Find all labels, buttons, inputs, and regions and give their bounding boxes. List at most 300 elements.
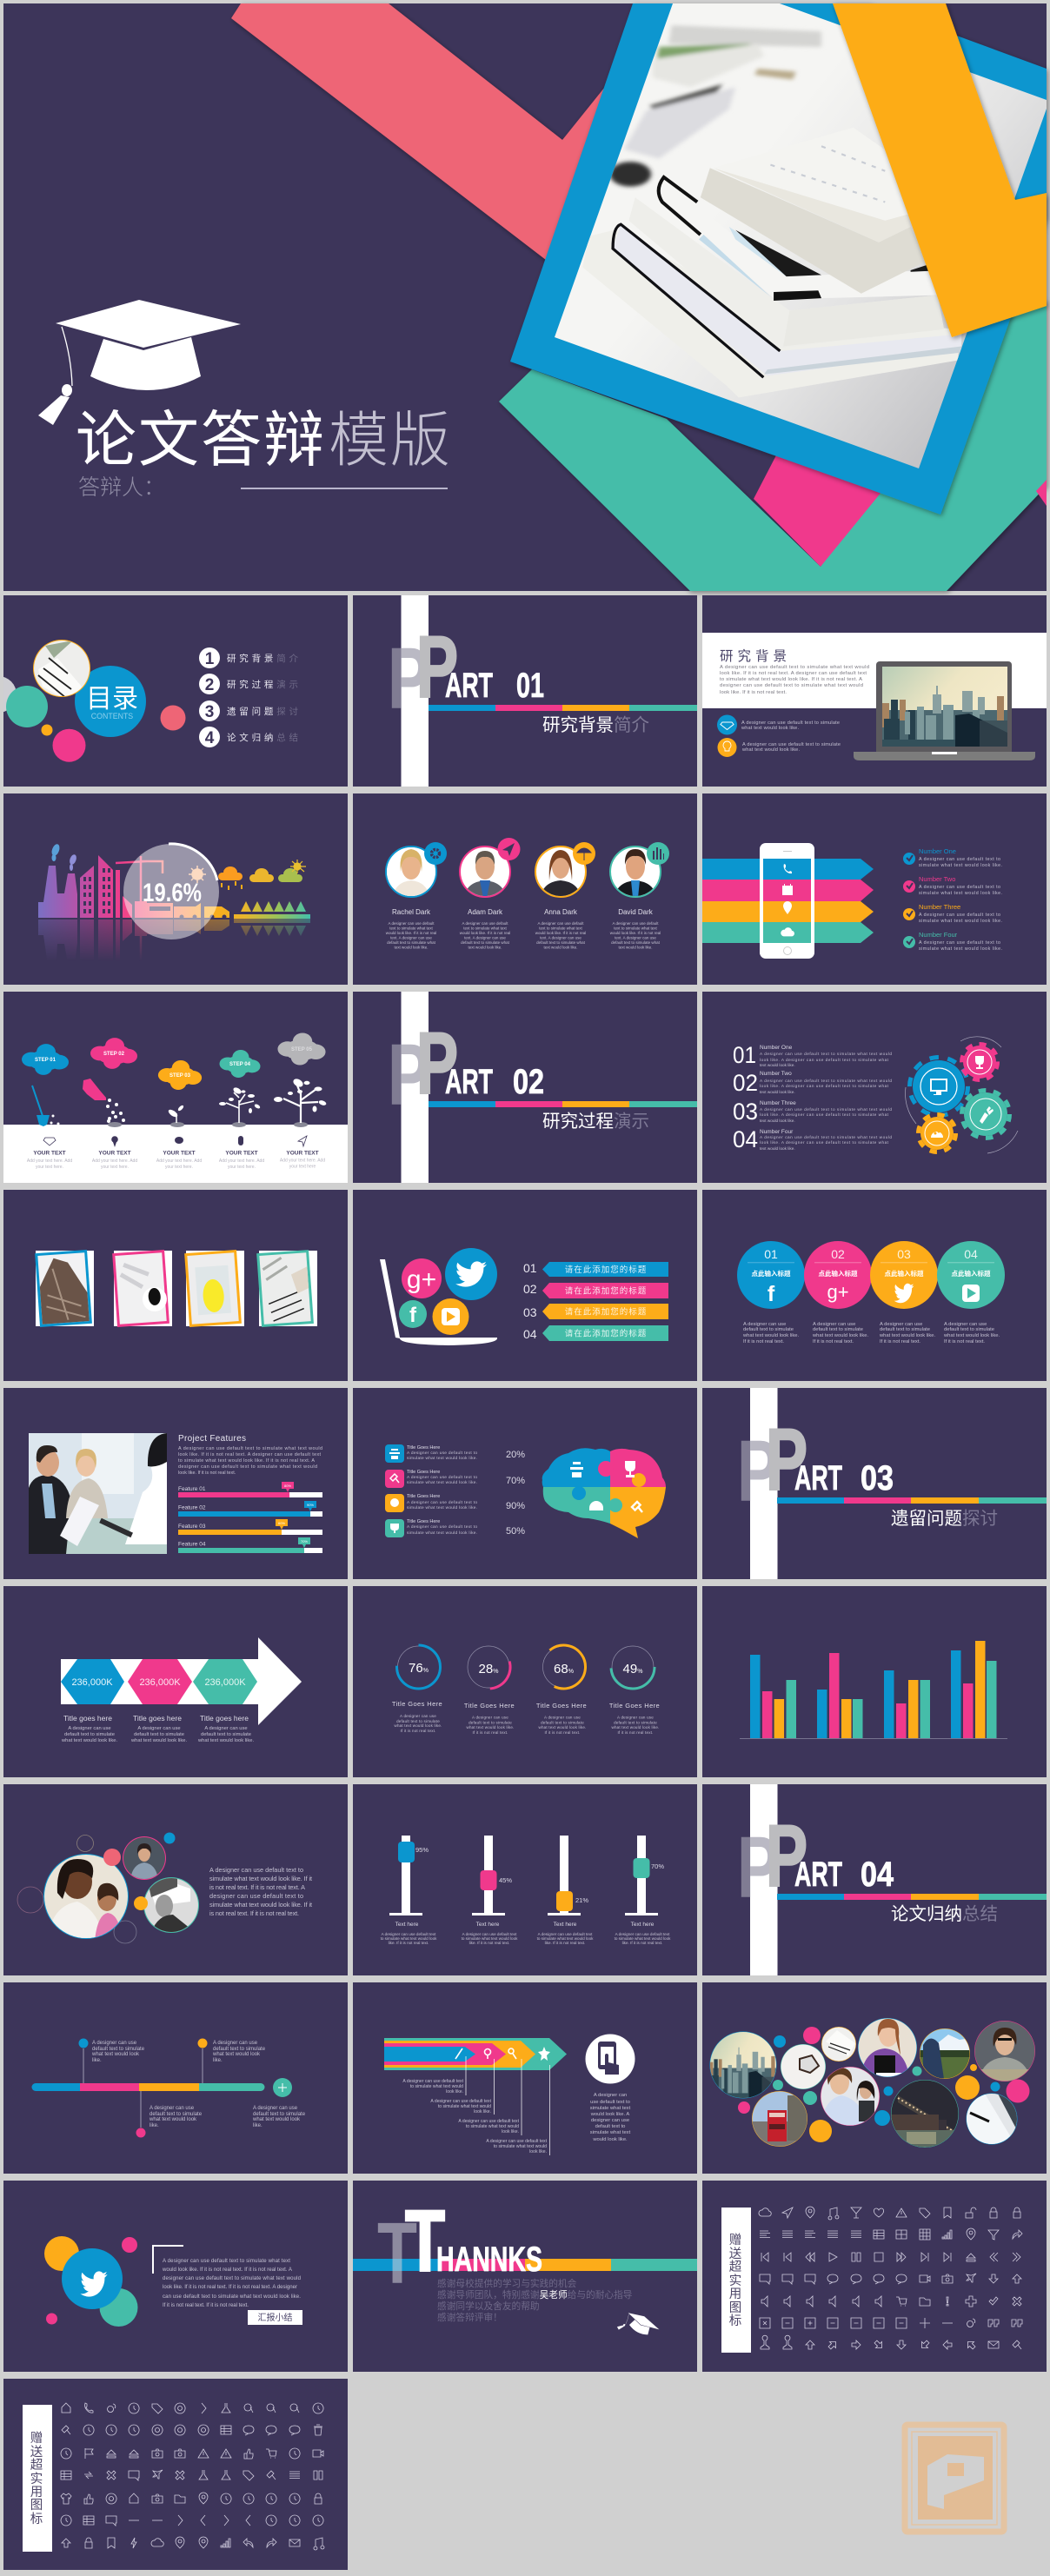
feature bar 03: 60% (278, 1521, 285, 1525)
cloud step 5 (277, 1032, 326, 1066)
bios: text to simulate what text (614, 926, 658, 930)
numbers: 03 (733, 1099, 758, 1125)
body text: A designer can use default text to simulate what text would (178, 1446, 322, 1451)
body text: A designer can use default text to (209, 1866, 303, 1874)
panel: social media list (353, 1190, 697, 1381)
soil mounds (108, 1122, 308, 1127)
big letter P: P (416, 1015, 458, 1112)
leader text: to simulate what text would (494, 2144, 547, 2149)
captions: what text would look like. (812, 1333, 869, 1338)
colour stripe (777, 1894, 1047, 1900)
translucent circle (123, 844, 219, 939)
cloud step 2 (90, 1038, 137, 1069)
side text: simulate what text (590, 2130, 631, 2135)
list item 3: simulate what text would look like. (407, 1505, 477, 1510)
captions: A designer can use (813, 1322, 855, 1327)
caption 2: what text would look like. (130, 1738, 187, 1743)
laptop outline (380, 1259, 497, 1345)
captions: A designer can use (743, 1322, 786, 1327)
list item 1: 20% (506, 1450, 525, 1460)
seeds (50, 1114, 59, 1125)
circle 04: 04 (964, 1247, 978, 1261)
panel: city infographic (3, 793, 348, 985)
thanks text: 感谢答辩评审！ (437, 2312, 502, 2323)
row 04: 请在此添加您的标题 (565, 1326, 647, 1338)
cloud step 4: STEP 04 (229, 1062, 251, 1067)
list item 2 (385, 1470, 525, 1488)
smoke 2 (69, 853, 77, 871)
photo circle (33, 640, 90, 697)
vertical label (721, 2208, 751, 2353)
list item 4: 论文归纳总结 (227, 731, 302, 744)
thanks text: 感谢导师团队，特别感谢吴老师给与的耐心指导 (437, 2289, 633, 2300)
layered arrows (384, 2038, 567, 2070)
plus button (273, 2078, 292, 2097)
summary button (248, 2310, 302, 2325)
colour arrows (702, 859, 874, 943)
colour stripe (429, 705, 697, 711)
leader text: to simulate what text would (438, 2104, 491, 2109)
person 4 (610, 846, 661, 898)
connector lines (83, 2048, 203, 2128)
body text (178, 1446, 322, 1476)
step 1 label: YOUR TEXT (33, 1151, 66, 1156)
row 02: 02 (523, 1282, 537, 1296)
sun (189, 866, 206, 883)
vertical label: 图 (729, 2301, 741, 2315)
note 4: like. (253, 2123, 262, 2128)
reflection (38, 919, 310, 956)
panel: twitter summary (3, 2181, 348, 2372)
list item 3 (903, 903, 1002, 924)
item 4: Number Four (760, 1129, 794, 1135)
vertical label: 赠 (30, 2431, 43, 2446)
big letter P: P (416, 619, 458, 716)
body text: designer can use default text to (209, 1892, 303, 1900)
big letter P: P (766, 1411, 807, 1509)
list item 3: 90% (506, 1501, 525, 1511)
list item 4: simulate what text would look like. (407, 1530, 477, 1536)
bios: default text to simulate what (611, 940, 661, 945)
vertical label: 用 (30, 2486, 43, 2500)
feature text 2: A designer can use default text to simulate (742, 742, 841, 747)
heading: 研究背景 (720, 646, 791, 665)
bios: default text to simulate what (536, 940, 586, 945)
photo: business meeting (29, 1433, 167, 1554)
list item 3: A designer can use default text to (919, 913, 1000, 918)
step 2 label: your text here. (101, 1165, 129, 1170)
caption 3: A designer can use (544, 1716, 581, 1719)
circle 02: 02 (831, 1247, 845, 1261)
list item 1: simulate what text would look like. (407, 1456, 477, 1461)
captions: If it is not real text. (813, 1339, 854, 1344)
vertical label: 超 (30, 2458, 43, 2473)
body text: A designer can use default text to simulate what text (163, 2258, 290, 2264)
ring 28%: 28% (479, 1662, 498, 1676)
circle 01: f (768, 1282, 775, 1306)
numbers: 01 (733, 1042, 756, 1068)
captions: to simulate what text would look (537, 1936, 594, 1941)
icon: google plus: g+ (407, 1265, 436, 1294)
body text: would look like. If it is not real text. If it is not real text. A (162, 2267, 293, 2273)
list item 4: Title Goes Here (407, 1519, 440, 1524)
bios: default text to simulate what (461, 940, 510, 945)
colour stripe (429, 1101, 697, 1107)
captions: like. If it is not real text. (469, 1941, 509, 1945)
row 03: 请在此添加您的标题 (565, 1305, 647, 1318)
bios: A designer can use default (388, 921, 435, 926)
side text (590, 2093, 631, 2142)
gear: orange (918, 1114, 956, 1152)
badge: gear (424, 842, 447, 865)
leader text (402, 2079, 548, 2154)
feature text 2: what text would look like. (741, 747, 800, 753)
row 01 (523, 1261, 668, 1277)
item 4: text would look like. (760, 1146, 795, 1151)
ring 49%: 49% (623, 1662, 642, 1676)
ring 49% (611, 1645, 655, 1689)
list item 4: 4 (205, 729, 215, 747)
list item 2: 研究过程演示 (227, 678, 302, 691)
note 2 (212, 2041, 266, 2063)
decorative circles (0, 666, 186, 762)
body text: designer can use default text to simulate what text would (178, 1464, 317, 1470)
cloud step 2: STEP 02 (103, 1052, 125, 1057)
step 5 label (280, 1151, 325, 1170)
vertical label (23, 2405, 52, 2552)
list item 4 (385, 1519, 525, 1537)
labels: Text here (631, 1922, 655, 1928)
vertical label: 实 (30, 2472, 43, 2486)
photo: boy (974, 2021, 1035, 2081)
captions: to simulate what text would look (462, 1936, 518, 1941)
building windows (83, 868, 170, 913)
note 3: like. (150, 2123, 159, 2128)
list item 3: 遗留问题探讨 (227, 705, 302, 718)
thanks text (437, 2278, 633, 2323)
labels: Text here (554, 1922, 577, 1928)
caption 3 (536, 1702, 587, 1735)
body text: look like. If it is not real text. If it is not real text. A designer (163, 2284, 297, 2290)
list item 2: A designer can use default text to (919, 885, 1000, 890)
gear: teal (961, 1090, 1010, 1139)
bios: text would look like. (618, 946, 653, 949)
bios: would look like. If it is not real (386, 931, 436, 935)
step 3 label: Add your text here. Add (156, 1159, 202, 1164)
outline circles (17, 1836, 136, 1943)
list item 4: A designer can use default text to (919, 940, 1000, 946)
row 01: 请在此添加您的标题 (565, 1263, 647, 1275)
icon: facebook (399, 1300, 427, 1328)
panel: part 04 divider (702, 1784, 1047, 1975)
white arrow (61, 1637, 302, 1725)
pink ribbon (754, 452, 882, 567)
caption 2 (130, 1714, 187, 1743)
thanks text: 感谢母校提供的学习与实践的机会 (437, 2278, 577, 2289)
caption 1: Title Goes Here (392, 1700, 442, 1708)
captions: A designer can use default text (538, 1932, 593, 1936)
caption 4: default text to simulate (614, 1721, 657, 1724)
caption 1: If it is not real text. (400, 1729, 436, 1733)
photo: mother and child (43, 1854, 129, 1941)
summary button: 汇报小结 (257, 2310, 292, 2323)
numbers: 04 (733, 1126, 758, 1152)
panel: growth steps (3, 992, 348, 1183)
body text: simulate what text would look like. If it (209, 1901, 312, 1909)
big letter T: T (405, 2193, 445, 2290)
names (392, 908, 654, 916)
feature bar 02: Feature 02 (178, 1505, 206, 1510)
circle 02: g+ (827, 1281, 849, 1303)
caption 4: If it is not real text. (617, 1730, 654, 1735)
photo: night bridge (891, 2080, 959, 2148)
ring 76%: 76% (409, 1661, 429, 1676)
caption 1: A designer can use (400, 1714, 436, 1718)
panel: tilted photos (3, 1190, 348, 1381)
slider 95%: 95% (415, 1846, 429, 1854)
list item 1 (903, 847, 1002, 868)
list item 2: 2 (205, 676, 214, 694)
slider 21% (548, 1836, 588, 1915)
numbers: 02 (733, 1070, 758, 1096)
step 4 label (219, 1151, 264, 1170)
bios: A designer can use default (537, 921, 584, 926)
row 03: 03 (523, 1305, 537, 1319)
icon: diamond (717, 714, 737, 735)
row 02 (523, 1282, 668, 1298)
vertical label: 送 (729, 2247, 742, 2261)
shadow letter P: P (737, 1423, 779, 1520)
list item 4: simulate what text would look like. (919, 946, 1002, 952)
photo: black and white (143, 1877, 199, 1933)
subtitle: 论文归纳总结 (891, 1899, 998, 1925)
circle 04 (937, 1241, 1005, 1309)
vertical label: 用 (729, 2287, 741, 2301)
panel: free icons 1 (702, 2181, 1047, 2372)
list item 3: A designer can use default text to (407, 1500, 477, 1505)
icon: video (433, 1298, 469, 1335)
bios: A designer can use default (462, 921, 508, 926)
circle 01: 点此输入标题 (751, 1269, 791, 1278)
white band (402, 992, 429, 1183)
cloud step 5: STEP 05 (291, 1047, 313, 1052)
leader text: look like. (446, 2089, 463, 2095)
labels: Text here (476, 1922, 500, 1928)
step 4 label: YOUR TEXT (225, 1151, 258, 1156)
photo 3 (184, 1250, 244, 1327)
captions: If it is not real text. (944, 1339, 985, 1344)
subtitle: 研究过程演示 (542, 1106, 649, 1132)
step 5 label: Add your text here. Add (280, 1158, 325, 1163)
white band (750, 1388, 777, 1579)
thanks text: 感谢同学以及舍友的帮助 (437, 2300, 540, 2312)
panel: big arrow (3, 1586, 348, 1777)
slider 45%: 45% (499, 1876, 512, 1884)
item 3: look like. A designer can use default text to simulate what (760, 1112, 889, 1117)
ring 28% (462, 1640, 515, 1694)
captions: default text to simulate (743, 1327, 794, 1332)
item 3: text would look like. (760, 1119, 795, 1123)
caption 3: default text to simulate (541, 1721, 584, 1724)
list item 3: simulate what text would look like. (919, 919, 1002, 924)
body text: is not real text. If it is not real text. A (209, 1883, 305, 1891)
panel: team members (353, 793, 697, 985)
leader text: A designer can use default text (458, 2119, 520, 2124)
body text: can use default text to simulate what text would look like. (163, 2294, 301, 2300)
caption 2: default text to simulate (469, 1721, 512, 1724)
caption 1: A designer can use (68, 1726, 111, 1731)
list item 2 (199, 674, 302, 694)
photo 4 (256, 1250, 317, 1327)
row 04: 04 (523, 1327, 537, 1341)
bios: default text to simulate what (387, 940, 436, 945)
feature bar 02: 90% (307, 1503, 314, 1507)
vertical label: 超 (729, 2260, 742, 2274)
shadow letter P: P (388, 1026, 429, 1124)
presenter label: 答辩人： (78, 470, 165, 501)
captions: to simulate what text would look (615, 1936, 671, 1941)
leader text: look like. (474, 2109, 491, 2115)
hexagon 1: 236,000K (71, 1677, 113, 1688)
bios: text. A designer can use (615, 935, 656, 940)
caption 3: If it is not real text. (544, 1730, 581, 1735)
dot blue (78, 2039, 89, 2048)
ring 76% (396, 1645, 440, 1689)
feature bar 01 (178, 1482, 322, 1497)
list item 4: 50% (506, 1526, 525, 1537)
photo: pen and paper (967, 2093, 1017, 2145)
note 3: default text to simulate (150, 2112, 203, 2117)
hexagon 3 (193, 1659, 257, 1704)
body text: A designer can use default text to simulate what text would (720, 665, 869, 670)
panel: part 02 divider (353, 992, 697, 1183)
cloud step 1 (22, 1044, 69, 1075)
part heading: ART (445, 1063, 493, 1101)
phone icons (781, 864, 794, 936)
leader lines (466, 2056, 549, 2155)
bracket (152, 2245, 183, 2274)
item 3: Number Three (760, 1100, 796, 1106)
circle 01: 01 (764, 1247, 778, 1261)
body text: If it is not real text. If it is not real text. (163, 2302, 249, 2308)
names: Anna Dark (544, 908, 578, 916)
captions: like. If it is not real text. (622, 1941, 662, 1945)
small tree (219, 1086, 261, 1123)
body text (209, 1866, 312, 1917)
caption 3: default text to simulate (201, 1732, 251, 1737)
sprout (167, 1105, 184, 1123)
numbers (733, 1042, 758, 1152)
body text: designer can use default text to simulate what text would (720, 683, 863, 688)
dot orange (198, 2039, 207, 2048)
note 1: A designer can use (92, 2041, 137, 2046)
big letter P: P (766, 1808, 807, 1905)
bios: would look like. If it is not real (610, 931, 661, 935)
hexagon 3: 236,000K (204, 1677, 246, 1688)
leader text: A designer can use default text (430, 2099, 492, 2104)
laptop (854, 661, 1035, 760)
note 2: like. (213, 2058, 223, 2063)
captions: default text to simulate (813, 1327, 863, 1332)
icon: facebook: f (409, 1304, 417, 1327)
icon: twitter (445, 1248, 497, 1300)
blue photo frame (510, 3, 1047, 515)
captions: default text to simulate (944, 1327, 994, 1332)
caption 4: what text would look like. (612, 1725, 659, 1730)
step 5 label: YOUR TEXT (286, 1151, 319, 1156)
panel: numbered gears (702, 992, 1047, 1183)
feature text 1 (741, 720, 840, 731)
presenter underline (241, 488, 448, 489)
feature bar 04: 70% (301, 1539, 308, 1544)
photo: stack of books (548, 3, 1047, 490)
note 4: default text to simulate (253, 2112, 306, 2117)
caption 3: Title Goes Here (536, 1702, 587, 1710)
list item 2: Title Goes Here (407, 1470, 440, 1475)
list item 1: A designer can use default text to (407, 1451, 477, 1456)
side text: simulate what text (590, 2106, 631, 2111)
list item 1: 研究背景简介 (227, 652, 302, 665)
caption 1 (61, 1714, 117, 1743)
badge: umbrella (573, 842, 595, 865)
body text: look like. If it is not real text. A designer can use default text (178, 1452, 322, 1457)
item 4: A designer can use default text to simulate what text would (760, 1135, 892, 1139)
panel: vertical sliders (353, 1784, 697, 1975)
teal ribbon (499, 300, 1047, 591)
caption 1: Title goes here (63, 1714, 112, 1723)
badge: plane (497, 838, 520, 860)
list item 4 (199, 727, 302, 747)
list item 1: Title Goes Here (407, 1445, 440, 1451)
bios: would look like. If it is not real (460, 931, 510, 935)
list item 4: Number Four (919, 931, 958, 939)
list item 1: simulate what text would look like. (919, 863, 1002, 868)
captions: to simulate what text would look (381, 1936, 437, 1941)
circle 02: 点此输入标题 (819, 1269, 858, 1278)
caption 3: what text would look like. (197, 1738, 254, 1743)
note 4: A designer can use (253, 2106, 298, 2111)
caption 1: what text would look like. (61, 1738, 117, 1743)
caption 2 (464, 1702, 515, 1735)
timeline bar (31, 2083, 264, 2091)
gear: pink (961, 1045, 998, 1079)
white band (402, 595, 429, 787)
feature text 2 (741, 742, 841, 753)
vertical label: 标 (30, 2512, 43, 2526)
slider 70%: 70% (651, 1862, 664, 1870)
labels (395, 1922, 655, 1928)
leader text: to simulate what text would (466, 2124, 519, 2129)
captions: A designer can use default text (615, 1932, 670, 1936)
caption 2: A designer can use (472, 1716, 508, 1719)
labels: Text here (395, 1922, 419, 1928)
captions: A designer can use (944, 1322, 987, 1327)
circle 03: 03 (897, 1247, 911, 1261)
rain (221, 881, 243, 890)
phone (760, 843, 814, 959)
shadow letter T: T (377, 2205, 417, 2302)
bios: text would look like. (543, 946, 578, 949)
bios: text. A designer can use (390, 935, 432, 940)
note 3: what text would look (149, 2117, 197, 2122)
item 2: A designer can use default text to simulate what text would (760, 1079, 892, 1083)
orbit arcs (906, 1037, 1018, 1153)
bios (386, 921, 661, 949)
item 2: text would look like. (760, 1090, 795, 1094)
circle 03 (870, 1241, 938, 1309)
shadow letter P: P (388, 630, 429, 727)
hexagon 2 (128, 1659, 192, 1704)
